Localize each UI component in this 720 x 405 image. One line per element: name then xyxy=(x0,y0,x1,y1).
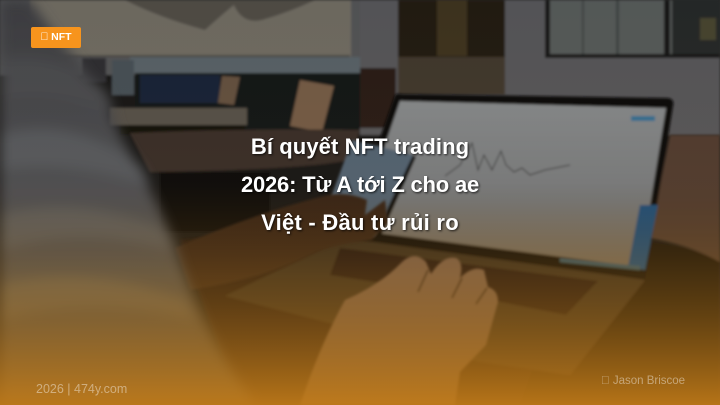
person's shoulder in striped sweater xyxy=(0,0,255,405)
keyboard xyxy=(330,248,598,315)
footer: author:  Jason Briscoe xyxy=(601,375,685,387)
screen chart line xyxy=(445,143,570,176)
hands xyxy=(175,194,498,405)
category badge:  NFT xyxy=(40,31,72,43)
category badge xyxy=(31,27,81,48)
title xyxy=(241,134,481,236)
title: Việt - Đầu tư rủi ro xyxy=(261,210,459,235)
right arm and table xyxy=(650,135,720,262)
screen xyxy=(356,101,666,267)
laptop on the right of the table xyxy=(180,94,720,405)
title: 2026: Từ A tới Z cho ae xyxy=(241,172,479,197)
footer: year and site: 2026 | 474y.com xyxy=(36,382,127,396)
laptop base xyxy=(225,238,645,375)
phone xyxy=(325,140,413,236)
screen bezel xyxy=(345,94,673,280)
blue side strip xyxy=(628,205,658,270)
title: Bí quyết NFT trading xyxy=(251,134,469,159)
